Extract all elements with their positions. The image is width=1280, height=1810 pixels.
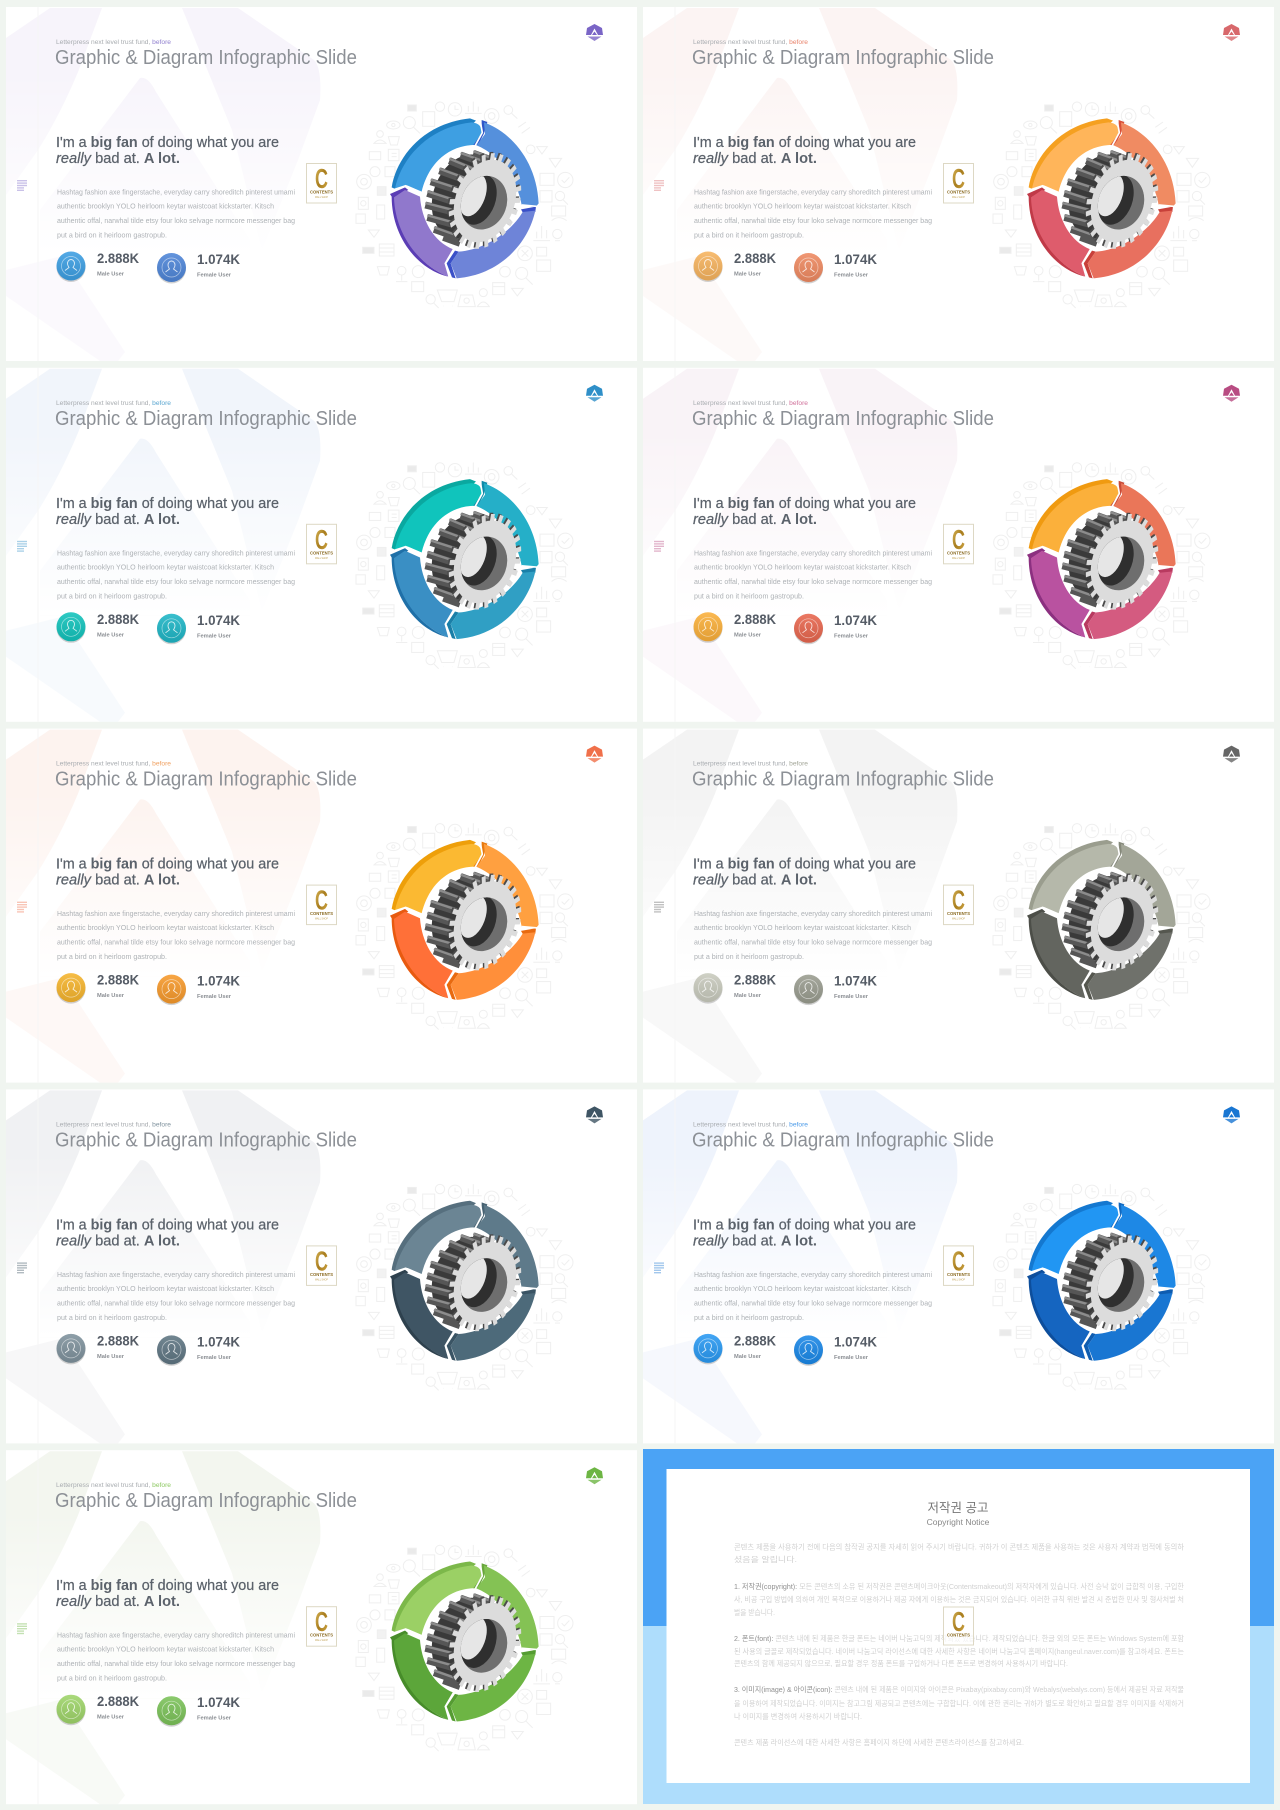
headline: I'm a big fan of doing what you are (56, 135, 279, 151)
body text: put a bird on it heirloom gastropub. (694, 593, 804, 600)
stat: male user: 2.888K (97, 250, 139, 266)
contents thumbnail: CONTENTS (310, 911, 333, 916)
stat: female user (794, 1333, 877, 1366)
headline: I'm a big fan of doing what you are (693, 135, 916, 151)
slide 4: orange magenta (643, 368, 1274, 722)
stat: female user: Female User (197, 994, 232, 1000)
contents thumbnail: CONTENTS (947, 550, 970, 555)
headline (56, 135, 279, 167)
slide card (643, 729, 1274, 1083)
body text: authentic brooklyn YOLO heirloom keytar waistcoat kickstarter. Kitsch (57, 564, 274, 571)
headline: I'm a big fan of doing what you are (693, 857, 916, 873)
slide 2: orange red (643, 7, 1274, 361)
four-arrow ring (1024, 478, 1178, 641)
body text: Hashtag fashion axe fingerstache, everyday carry shoreditch pinterest umami (57, 550, 295, 557)
stat: female user (794, 973, 877, 1005)
stat: male user: Male User (734, 993, 762, 999)
headline: I'm a big fan of doing what you are (56, 1217, 279, 1233)
contents thumbnail: C (315, 1245, 328, 1276)
headline (693, 496, 916, 528)
contents thumbnail: C (952, 885, 965, 916)
side menu icon (17, 902, 27, 913)
stat: male user: 2.888K (97, 972, 139, 988)
body text: authentic offal, narwhal tilde etsy four loko selvage normcore messenger bag (57, 940, 295, 947)
headline (56, 857, 279, 889)
copyright heading: 저작권 공고 (928, 1501, 988, 1515)
four-arrow ring (387, 839, 541, 1002)
notice intro (734, 1542, 1184, 1564)
contents thumbnail: MALL SHOP (952, 1277, 965, 1281)
body text: Hashtag fashion axe fingerstache, everyday carry shoreditch pinterest umami (694, 190, 932, 196)
contents thumbnail: CONTENTS (310, 550, 333, 555)
contents thumbnail: CONTENTS (947, 1272, 970, 1277)
ring inner backdrop (1018, 831, 1184, 1008)
body text: authentic brooklyn YOLO heirloom keytar waistcoat kickstarter. Kitsch (57, 204, 274, 210)
gear (1057, 863, 1171, 981)
ring inner backdrop (381, 831, 547, 1008)
slide 6: grey (643, 729, 1274, 1083)
stat: female user: 1.074K (197, 1333, 240, 1349)
background logo tint (6, 730, 331, 1083)
headline: I'm a big fan of doing what you are (693, 496, 916, 512)
headline: really bad at. A lot. (693, 151, 817, 167)
copyright subheading: Copyright Notice (927, 1517, 990, 1527)
side menu icon (654, 1262, 664, 1273)
stat: male user (56, 250, 139, 282)
contents thumbnail: CONTENTS (947, 190, 970, 194)
body text (57, 190, 295, 240)
contents thumbnail: CONTENTS (310, 1633, 333, 1638)
side menu icon (17, 1262, 27, 1273)
headline (693, 857, 916, 889)
stat: female user: Female User (834, 633, 869, 639)
stat: male user: Male User (97, 1354, 125, 1360)
contents thumbnail: CONTENTS (947, 1632, 970, 1638)
gear (1057, 503, 1171, 620)
background logo tint (643, 1090, 968, 1443)
gear (1057, 142, 1171, 259)
body text: put a bird on it heirloom gastropub. (57, 232, 167, 240)
four-arrow ring (387, 478, 541, 641)
title: Graphic & Diagram Infographic Slide (692, 1129, 994, 1151)
body text: authentic offal, narwhal tilde etsy four loko selvage normcore messenger bag (694, 218, 932, 225)
notice intro: 콘텐츠 제품을 사용하기 전에 다음의 참작권 공지를 자세히 읽어 주시기 바랍니다. 귀하가 이 콘텐츠 제품을 사용하는 것은 사용자 계약과 법적에 동의하 (734, 1542, 1184, 1552)
stat: male user: 2.888K (734, 1332, 776, 1348)
eyebrow text: Letterpress next level trust fund, before (693, 400, 808, 407)
gear (420, 1224, 534, 1341)
icon doodle cloud (356, 823, 573, 1030)
headline: really bad at. A lot. (56, 1233, 180, 1249)
body text: authentic offal, narwhal tilde etsy four loko selvage normcore messenger bag (57, 1300, 295, 1307)
body text (694, 190, 932, 240)
body text: put a bird on it heirloom gastropub. (57, 593, 167, 600)
stat: female user: 1.074K (197, 1694, 240, 1710)
stat: male user: 2.888K (97, 1332, 139, 1348)
stat: female user: 1.074K (197, 251, 240, 267)
body text: Hashtag fashion axe fingerstache, everyday carry shoreditch pinterest umami (694, 550, 932, 557)
contents thumbnail: C (952, 524, 965, 555)
body text: put a bird on it heirloom gastropub. (57, 1676, 167, 1683)
body text: authentic offal, narwhal tilde etsy four loko selvage normcore messenger bag (57, 1661, 295, 1668)
body text (694, 911, 932, 961)
brand logo (1223, 24, 1240, 41)
side menu icon (17, 1623, 27, 1634)
contents thumbnail (944, 885, 974, 925)
stat: male user: Male User (97, 632, 125, 638)
contents thumbnail: CONTENTS (310, 1272, 333, 1277)
gear (420, 142, 534, 259)
stat: female user (157, 1694, 240, 1727)
contents thumbnail (306, 1606, 336, 1646)
body text: authentic offal, narwhal tilde etsy four loko selvage normcore messenger bag (57, 579, 295, 586)
ring inner backdrop (381, 1192, 547, 1369)
slide 3: teal (6, 368, 637, 722)
icon doodle cloud (356, 1545, 573, 1751)
stat: male user: 2.888K (97, 611, 139, 627)
headline: I'm a big fan of doing what you are (56, 857, 279, 873)
icon doodle cloud (993, 462, 1210, 669)
eyebrow text: Letterpress next level trust fund, before (56, 1482, 171, 1489)
headline: really bad at. A lot. (693, 1233, 817, 1249)
headline: really bad at. A lot. (56, 873, 180, 889)
stat: female user (157, 1333, 240, 1366)
slide card (6, 1089, 637, 1443)
slide 8: bright blue (643, 1089, 1274, 1443)
stat: male user (694, 1332, 776, 1364)
stat: male user (694, 611, 776, 643)
slide card (6, 1450, 637, 1804)
slide card (643, 1089, 1274, 1443)
eyebrow text: Letterpress next level trust fund, before (693, 1121, 808, 1128)
title: Graphic & Diagram Infographic Slide (692, 408, 994, 430)
headline: really bad at. A lot. (56, 512, 180, 528)
notice section 2: 된 사용의 글꼴로 제작되었습니다. 네이버 나눔고딕 라이선스에 대한 사세한 사항은 네이버 나눔고딕 홈페이지(hangeul.naver.com)를 참고하세요. 폰트는 (734, 1646, 1184, 1656)
notice section 3: 3. 이미지(image) & 아이콘(icon): 콘텐츠 내에 된 제품은 이미지와 아이콘은 Pixabay(pixabay.com)와 Webalys(webalys.com) 등에서 제공된 자료 저작물 (734, 1684, 1184, 1694)
slide card (6, 729, 637, 1083)
ring inner backdrop (1018, 1192, 1184, 1369)
background logo tint (6, 1090, 331, 1443)
body text: Hashtag fashion axe fingerstache, everyday carry shoreditch pinterest umami (57, 911, 295, 918)
brand logo (1223, 1106, 1240, 1123)
stat: female user: Female User (197, 272, 232, 278)
stat: female user: Female User (197, 633, 232, 639)
contents thumbnail: MALL SHOP (315, 195, 328, 199)
body text: put a bird on it heirloom gastropub. (694, 954, 804, 961)
stat: male user: 2.888K (97, 1693, 139, 1709)
title: Graphic & Diagram Infographic Slide (55, 408, 357, 430)
gear (420, 863, 534, 981)
body text: authentic offal, narwhal tilde etsy four loko selvage normcore messenger bag (694, 940, 932, 947)
stat: female user (157, 251, 240, 284)
body text: authentic brooklyn YOLO heirloom keytar waistcoat kickstarter. Kitsch (57, 1286, 274, 1293)
title: Graphic & Diagram Infographic Slide (55, 47, 357, 69)
contents thumbnail (944, 1245, 974, 1285)
icon doodle cloud (993, 823, 1210, 1030)
contents thumbnail: MALL SHOP (952, 195, 965, 199)
stat: male user: Male User (734, 632, 762, 638)
stat: female user: Female User (834, 994, 869, 1000)
notice section 2: 콘텐츠의 함께 제공되지 않으므로, 필요할 경우 정품 폰트를 구입하거나 다른 폰트로 변경하여 사용하시기 바랍니다. (734, 1658, 1068, 1668)
panel: copyright notice (643, 1449, 1274, 1804)
brand logo (586, 746, 603, 763)
contents thumbnail (944, 163, 974, 203)
notice section 1: 사, 비공 구입 방법에 의하여 개인 목적으로 이용하거나 제공 자에게 이용하는 것은 금지되어 있습니다. 이러한 규칙 위반 발견 시 준법한 민사 및 형사처벌 처 (734, 1594, 1184, 1604)
body text (694, 550, 932, 600)
body text: authentic offal, narwhal tilde etsy four loko selvage normcore messenger bag (694, 579, 932, 586)
title: Graphic & Diagram Infographic Slide (55, 769, 357, 791)
contents thumbnail (306, 163, 336, 203)
four-arrow ring (1024, 1200, 1178, 1363)
four-arrow ring (387, 117, 541, 281)
notice section 2: 2. 폰트(font): 콘텐츠 내에 된 제품은 한글 폰트는 네이버 나눔고딕의 제작되었 있습니다. 제작되었습니다. 한글 외의 모든 폰트는 Windows System에 포함 (734, 1633, 1184, 1643)
contents thumbnail: MALL SHOP (315, 556, 328, 560)
slide card (643, 7, 1274, 361)
icon doodle cloud (356, 1184, 573, 1390)
stat: male user: Male User (97, 993, 125, 999)
headline (693, 135, 916, 167)
stat: male user (694, 972, 776, 1004)
side menu icon (17, 180, 27, 191)
contents thumbnail (306, 524, 336, 564)
four-arrow ring (1024, 839, 1178, 1002)
stat: male user (694, 250, 776, 282)
headline (56, 1217, 279, 1249)
stat: male user: 2.888K (734, 972, 776, 988)
notice footer line: 콘텐츠 제품 라이선스에 대한 사세한 사항은 홈페이지 하단에 사세한 콘텐츠라이선스를 참고하세요. (734, 1737, 1024, 1747)
stat: male user: Male User (734, 1354, 762, 1360)
stat: female user: Female User (834, 272, 869, 278)
body text: authentic brooklyn YOLO heirloom keytar waistcoat kickstarter. Kitsch (694, 204, 911, 210)
four-arrow ring (387, 1200, 541, 1363)
stat: male user: Male User (734, 272, 762, 278)
contents thumbnail: C (315, 885, 328, 916)
headline: really bad at. A lot. (693, 512, 817, 528)
stat: male user: Male User (97, 272, 125, 278)
eyebrow text: Letterpress next level trust fund, before (56, 761, 171, 768)
notice section 3: 을 이용하여 제작되었습니다. 이미지는 참고그림 제공되고 콘텐츠에는 구합합니다. 이에 관한 권리는 귀하가 별도로 확인하고 필요할 경우 이미지를 삭제하거 (734, 1698, 1184, 1708)
stat: female user (794, 612, 877, 644)
stat: female user: Female User (197, 1355, 232, 1361)
icon doodle cloud (993, 102, 1210, 308)
headline: really bad at. A lot. (693, 873, 817, 889)
stat: female user (157, 973, 240, 1005)
brand logo (586, 1106, 603, 1123)
contents thumbnail: CONTENTS (947, 911, 970, 916)
brand logo (1223, 746, 1240, 763)
ring inner backdrop (381, 109, 547, 287)
title: Graphic & Diagram Infographic Slide (55, 1490, 357, 1512)
slide card (6, 368, 637, 722)
contents thumbnail (306, 1245, 336, 1285)
body text: Hashtag fashion axe fingerstache, everyday carry shoreditch pinterest umami (57, 190, 295, 196)
notice section 1: 1. 저작권(copyright): 모든 콘텐츠의 소유 된 저작권은 콘텐츠메이크아웃(Contentsmakeout)의 저작자에게 있습니다. 사전 승낙 없이 급합적 이용, 구입한 (734, 1581, 1184, 1591)
body text: authentic brooklyn YOLO heirloom keytar waistcoat kickstarter. Kitsch (57, 925, 274, 932)
stat: male user (56, 972, 139, 1004)
gear (420, 1585, 534, 1702)
body text: put a bird on it heirloom gastropub. (694, 1315, 804, 1322)
contents thumbnail: C (952, 1606, 965, 1637)
eyebrow text: Letterpress next level trust fund, before (56, 39, 171, 46)
slide 7: slate (6, 1089, 637, 1443)
contents thumbnail: C (315, 163, 328, 194)
stat: female user: 1.074K (834, 612, 877, 628)
brand logo (586, 24, 603, 41)
body text: Hashtag fashion axe fingerstache, everyday carry shoreditch pinterest umami (694, 911, 932, 918)
notice section 1: 벌을 받습니다. (734, 1607, 775, 1617)
blue frame lower (643, 1626, 1274, 1804)
stat: male user (56, 1332, 139, 1364)
body text: put a bird on it heirloom gastropub. (57, 954, 167, 961)
stat: female user: 1.074K (834, 1333, 877, 1349)
ring inner backdrop (381, 1552, 547, 1730)
title: Graphic & Diagram Infographic Slide (55, 1129, 357, 1151)
stat: female user: 1.074K (834, 251, 877, 267)
contents thumbnail: C (952, 1245, 965, 1276)
body text: authentic brooklyn YOLO heirloom keytar waistcoat kickstarter. Kitsch (694, 925, 911, 932)
body text: authentic brooklyn YOLO heirloom keytar waistcoat kickstarter. Kitsch (694, 1286, 911, 1293)
four-arrow ring (387, 1561, 541, 1724)
stat: female user: 1.074K (197, 612, 240, 628)
body text: authentic brooklyn YOLO heirloom keytar waistcoat kickstarter. Kitsch (694, 564, 911, 571)
brand logo (586, 385, 603, 402)
background logo tint (6, 1451, 331, 1804)
gear (1057, 1224, 1171, 1341)
eyebrow text: Letterpress next level trust fund, before (693, 761, 808, 768)
white notice sheet (666, 1469, 1250, 1783)
notice section 3 (734, 1684, 1184, 1721)
contents thumbnail: C (315, 1606, 328, 1637)
body text: put a bird on it heirloom gastropub. (57, 1315, 167, 1322)
icon doodle cloud (356, 462, 573, 669)
stat: male user (56, 611, 139, 643)
background logo tint (643, 8, 968, 361)
contents thumbnail: MALL SHOP (952, 556, 965, 560)
headline: I'm a big fan of doing what you are (56, 496, 279, 512)
body text: put a bird on it heirloom gastropub. (694, 232, 804, 240)
stat: female user: 1.074K (834, 973, 877, 989)
headline: I'm a big fan of doing what you are (693, 1217, 916, 1233)
contents thumbnail: MALL SHOP (315, 1638, 328, 1642)
contents thumbnail: MALL SHOP (315, 1277, 328, 1281)
background logo tint (6, 369, 331, 722)
eyebrow text: Letterpress next level trust fund, before (693, 39, 808, 46)
slide 5: amber orange (6, 729, 637, 1083)
brand logo (1223, 385, 1240, 402)
slide 1: blue purple (6, 7, 637, 361)
stat: female user (794, 251, 877, 284)
ring inner backdrop (381, 470, 547, 648)
body text: Hashtag fashion axe fingerstache, everyday carry shoreditch pinterest umami (694, 1272, 932, 1279)
headline: I'm a big fan of doing what you are (56, 1578, 279, 1594)
contents thumbnail (944, 524, 974, 564)
stat: male user: Male User (97, 1715, 125, 1721)
ring inner backdrop (1018, 470, 1184, 648)
contents thumbnail: CONTENTS (310, 190, 333, 194)
body text (57, 1272, 295, 1322)
body text: authentic offal, narwhal tilde etsy four loko selvage normcore messenger bag (694, 1300, 932, 1307)
headline: really bad at. A lot. (56, 151, 180, 167)
brand logo (586, 1467, 603, 1484)
body text: Hashtag fashion axe fingerstache, everyday carry shoreditch pinterest umami (57, 1272, 295, 1279)
background logo tint (643, 730, 968, 1083)
headline (56, 1578, 279, 1610)
side menu icon (654, 902, 664, 913)
stat: male user (56, 1693, 139, 1725)
icon doodle cloud (356, 102, 573, 308)
background logo tint (6, 8, 331, 361)
side menu icon (17, 541, 27, 552)
background logo tint (643, 369, 968, 722)
side menu icon (654, 541, 664, 552)
ring inner backdrop (1018, 109, 1184, 287)
body text (57, 1633, 295, 1683)
slide card (6, 7, 637, 361)
body text (57, 911, 295, 961)
stat: female user (157, 612, 240, 644)
body text: authentic brooklyn YOLO heirloom keytar waistcoat kickstarter. Kitsch (57, 1647, 274, 1654)
eyebrow text: Letterpress next level trust fund, before (56, 400, 171, 407)
slide 9: green (6, 1450, 637, 1804)
gear (420, 503, 534, 620)
body text: Hashtag fashion axe fingerstache, everyday carry shoreditch pinterest umami (57, 1633, 295, 1640)
contents thumbnail (306, 885, 336, 925)
four-arrow ring (1024, 117, 1178, 281)
stat: female user: Female User (197, 1716, 232, 1722)
stat: female user: Female User (834, 1355, 869, 1361)
contents thumbnail: C (952, 163, 965, 194)
headline: really bad at. A lot. (56, 1594, 180, 1610)
side menu icon (654, 180, 664, 191)
notice section 2 (734, 1633, 1184, 1668)
body text (694, 1272, 932, 1322)
body text (57, 550, 295, 600)
slide card (643, 368, 1274, 722)
contents thumbnail: MALL SHOP (315, 917, 328, 921)
body text: authentic offal, narwhal tilde etsy four loko selvage normcore messenger bag (57, 218, 295, 225)
blue frame upper (643, 1449, 1274, 1626)
notice section 1 (734, 1581, 1184, 1617)
stat: female user: 1.074K (197, 973, 240, 989)
contents thumbnail: MALL SHOP (952, 917, 965, 921)
headline (693, 1217, 916, 1249)
notice section 3: 나 이미지를 변경하여 사용하시기 바랍니다. (734, 1711, 862, 1721)
stat: male user: 2.888K (734, 250, 776, 266)
title: Graphic & Diagram Infographic Slide (692, 769, 994, 791)
notice intro: 셨음을 알립니다. (734, 1555, 797, 1564)
contents thumbnail (944, 1606, 974, 1645)
eyebrow text: Letterpress next level trust fund, before (56, 1121, 171, 1128)
stat: male user: 2.888K (734, 611, 776, 627)
headline (56, 496, 279, 528)
icon doodle cloud (993, 1184, 1210, 1390)
contents thumbnail: C (315, 524, 328, 555)
title: Graphic & Diagram Infographic Slide (692, 47, 994, 69)
